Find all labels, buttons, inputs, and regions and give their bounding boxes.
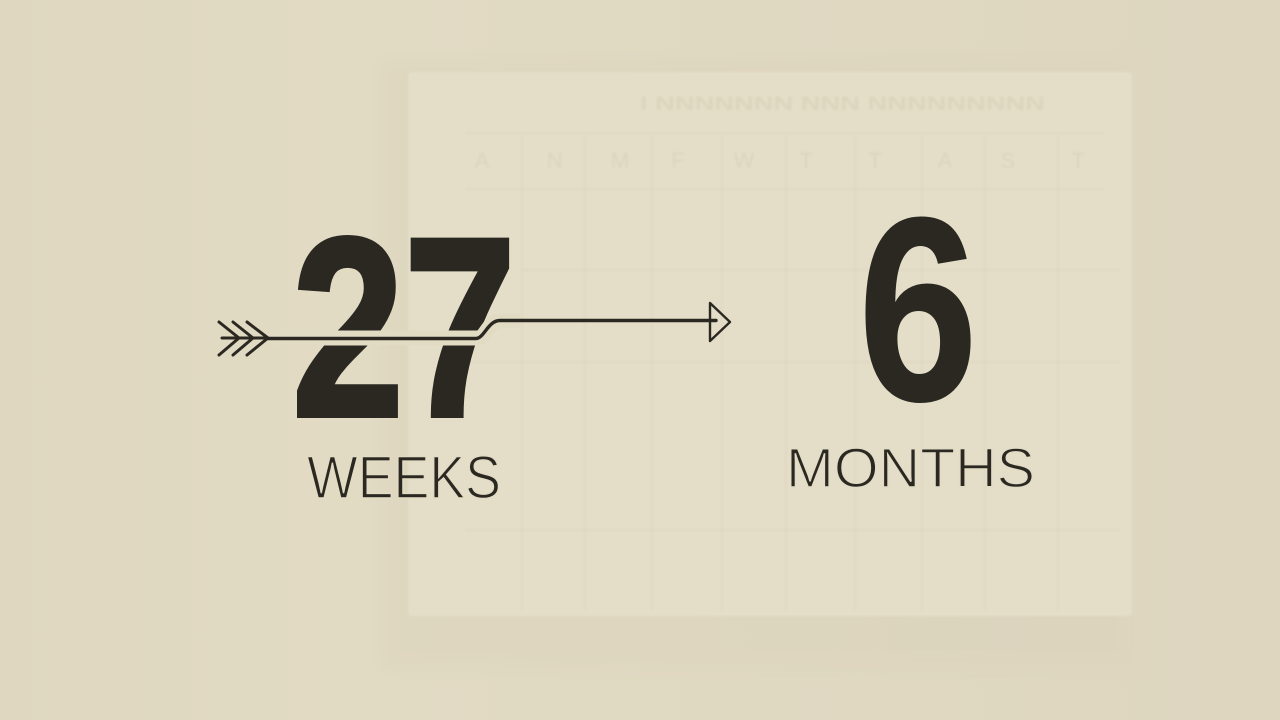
calendar weekday labels: T [868, 148, 882, 173]
calendar weekday labels: A [938, 148, 953, 173]
calendar weekday labels [475, 148, 1085, 173]
calendar weekday labels: N [547, 148, 563, 173]
arrow shaft [268, 320, 716, 338]
calendar grid [465, 133, 1120, 610]
calendar weekday labels: M [611, 148, 629, 173]
calendar weekday labels: T [799, 148, 813, 173]
label MONTHS: MONTHS [786, 436, 1035, 499]
arrow head [710, 303, 730, 341]
calendar weekday labels: F [671, 148, 685, 173]
calendar sheet [408, 72, 1132, 616]
calendar weekday labels: A [475, 148, 490, 173]
label WEEKS: WEEKS [307, 444, 501, 511]
calendar weekday labels: W [734, 148, 755, 173]
arrow from 27 weeks to 6 months [219, 303, 730, 355]
calendar title: I NNNNNNN NNN NNNNNNNNN [640, 94, 1045, 115]
right figure: 6 months [786, 163, 1035, 499]
calendar backdrop [380, 60, 1136, 670]
arrow fletching [219, 322, 268, 355]
calendar weekday labels: S [1001, 148, 1015, 173]
number 27: 27 [292, 186, 516, 470]
left figure: 27 weeks [292, 186, 516, 511]
arrow knockout band [270, 321, 520, 338]
calendar weekday labels: T [1071, 148, 1085, 173]
calendar shadow [380, 60, 1136, 670]
number 6: 6 [858, 163, 978, 456]
